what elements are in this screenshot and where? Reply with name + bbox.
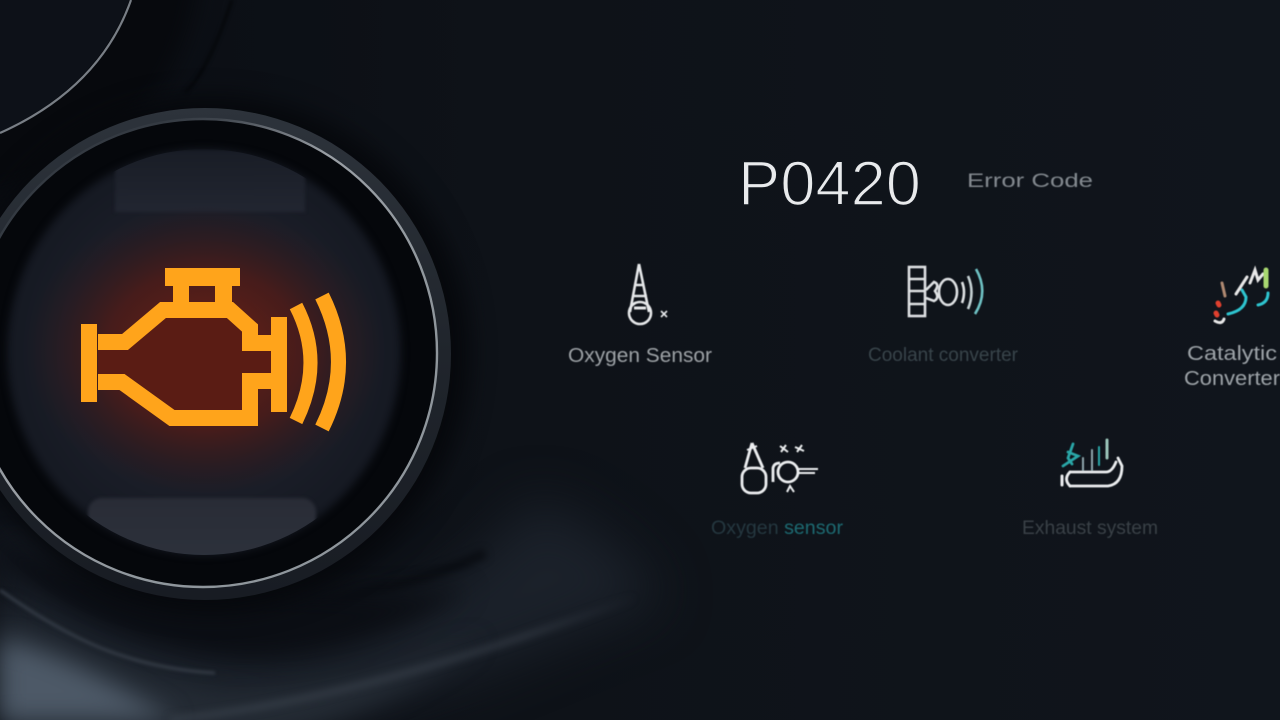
label: catalytic converter: Catalytic <box>1187 343 1277 365</box>
icon: flask and sensor <box>742 443 818 493</box>
dashboard swoosh <box>0 500 660 720</box>
label: oxygen sensor: Oxygen Sensor <box>568 345 712 367</box>
label: oxygen sensor bank: Oxygen sensor <box>711 518 844 539</box>
outer bezel <box>0 108 451 600</box>
item: exhaust system <box>1022 440 1158 539</box>
icon: exhaust pipe <box>1062 440 1122 486</box>
item: catalytic converter <box>1184 270 1280 390</box>
icon: converter with waves <box>909 267 982 316</box>
item: oxygen sensor <box>568 264 712 367</box>
item: coolant converter <box>868 267 1019 366</box>
icon: oxygen sensor probe <box>629 264 667 324</box>
top-left gauge <box>0 0 232 200</box>
bezel highlight line <box>0 119 437 587</box>
subtitle: error code: Error Code <box>967 171 1093 192</box>
title: P0420: P0420 <box>738 149 921 219</box>
item: oxygen sensor bank <box>711 443 844 539</box>
inner disc <box>7 149 401 555</box>
icon: check engine light <box>81 268 338 428</box>
engine outline <box>81 268 338 428</box>
orange glow <box>48 225 361 474</box>
icon: catalytic converter <box>1215 270 1268 323</box>
dial shadow <box>0 96 470 612</box>
bottom plate <box>87 498 317 555</box>
main dial <box>0 96 470 612</box>
engine interior <box>98 318 272 410</box>
label: exhaust system: Exhaust system <box>1022 518 1158 539</box>
top plate <box>115 150 305 212</box>
panel plates <box>25 150 385 568</box>
label: coolant converter: Coolant converter <box>868 345 1019 366</box>
item: catalytic converter: Converter <box>1184 368 1280 390</box>
signal arcs <box>296 306 310 421</box>
